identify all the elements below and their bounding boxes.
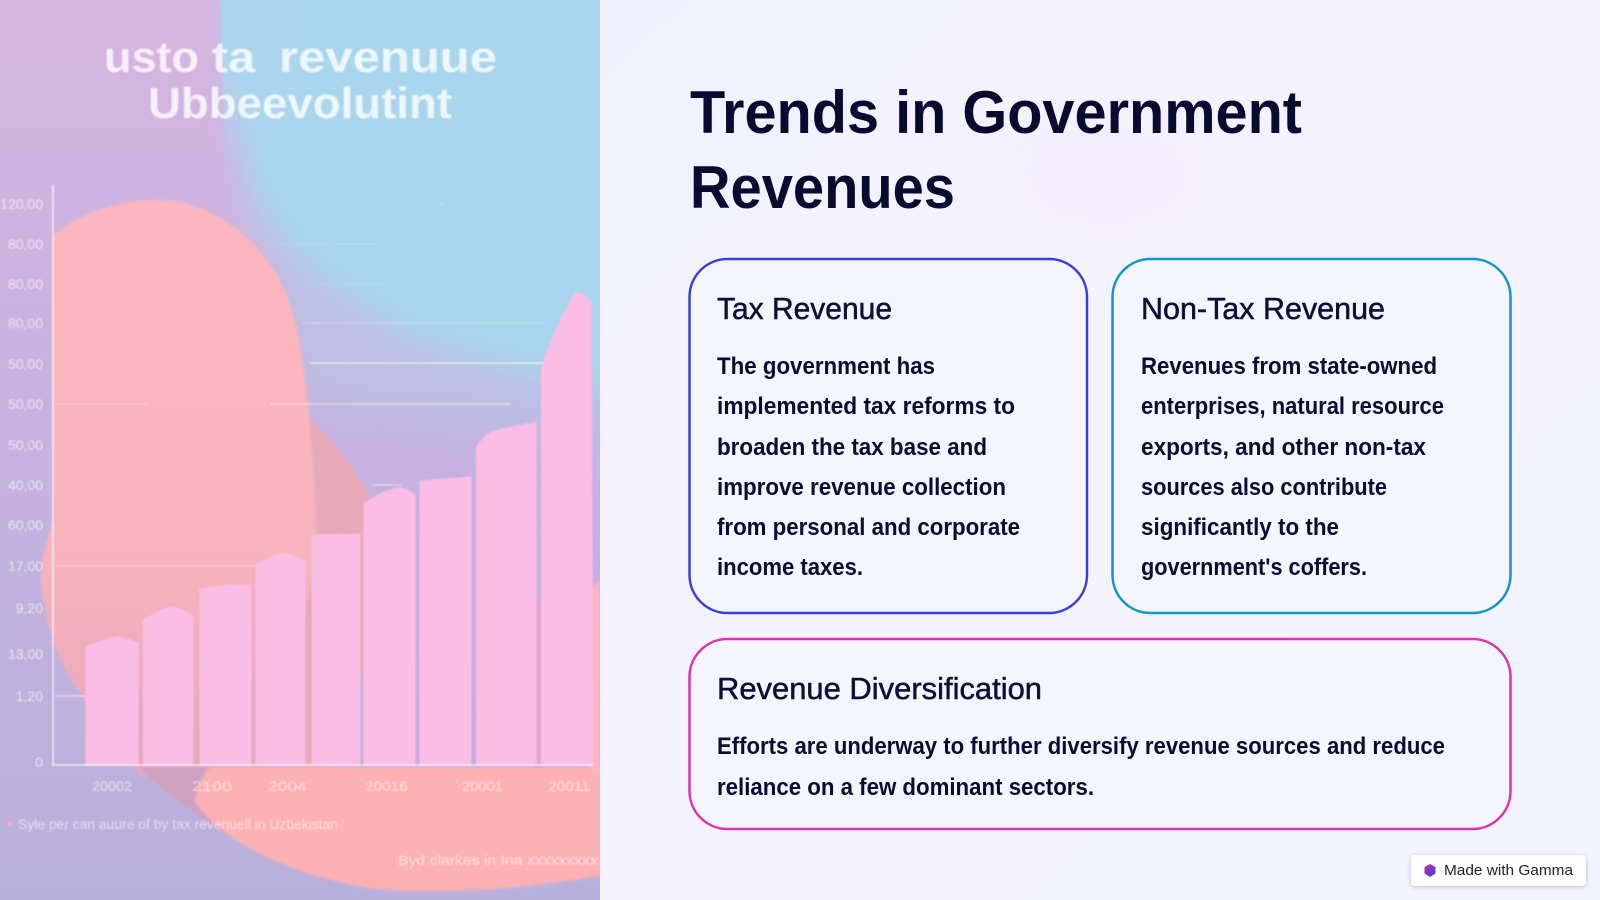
text: tax revenue body: implemented tax reforms to bbox=[717, 393, 1015, 420]
right edge salmon bbox=[590, 580, 600, 775]
x axis labels: 2100 bbox=[192, 778, 232, 794]
badge label: Made with Gamma bbox=[1444, 862, 1574, 879]
chart legend: Syle per can auure of by tax revenuell in Uzbekistan bbox=[18, 816, 338, 832]
image title bbox=[106, 43, 496, 120]
text: tax revenue body bbox=[717, 353, 1020, 581]
blue shape upper edge bbox=[220, 0, 242, 138]
panel: chart image bbox=[0, 0, 600, 900]
x axis labels: 20011 bbox=[548, 778, 590, 794]
text: tax revenue body: improve revenue collection bbox=[717, 474, 1006, 501]
image background bbox=[0, 0, 600, 900]
pink background glow bbox=[1020, 140, 1200, 210]
text: non-tax revenue body bbox=[1141, 353, 1444, 581]
grid lines bbox=[55, 322, 545, 698]
lower dark blob bbox=[141, 766, 222, 831]
x axis labels: 20001 bbox=[462, 778, 503, 794]
y axis labels: 80,00 bbox=[8, 276, 43, 292]
text: revenue diversification body: Efforts are underway to further diversify revenue sources and reduce bbox=[717, 733, 1445, 760]
axes bbox=[53, 185, 593, 765]
text: non-tax revenue body: government's coffers. bbox=[1141, 554, 1367, 581]
panel: non-tax revenue bbox=[1112, 259, 1510, 613]
text: non-tax revenue body: exports, and other non-tax bbox=[1141, 434, 1427, 461]
text: revenue diversification body bbox=[717, 733, 1445, 801]
y axis labels: 9,20 bbox=[16, 600, 43, 616]
text: non-tax revenue body: enterprises, natural resource bbox=[1141, 393, 1444, 420]
y axis labels: 0 bbox=[35, 754, 43, 770]
y axis labels: 120,00 bbox=[0, 196, 43, 212]
text: non-tax revenue body: significantly to the bbox=[1141, 514, 1339, 541]
image title: usto bbox=[104, 33, 199, 82]
text: revenue diversification body: reliance on a few dominant sectors. bbox=[717, 774, 1094, 801]
dark pink blob bbox=[133, 418, 372, 776]
x axis labels bbox=[92, 781, 590, 792]
y axis labels: 1,20 bbox=[16, 688, 43, 704]
y axis labels: 13,00 bbox=[8, 646, 43, 662]
image title: Ubbeevolutint bbox=[148, 79, 452, 128]
y axis labels: 80,00 bbox=[8, 236, 43, 252]
y axis labels: 50,00 bbox=[8, 356, 43, 372]
image title: revenuue bbox=[279, 33, 497, 82]
text: tax revenue body: income taxes. bbox=[717, 554, 863, 581]
y axis labels: 40,00 bbox=[8, 477, 43, 493]
heading: tax revenue: Tax Revenue bbox=[717, 291, 892, 326]
text: tax revenue body: The government has bbox=[717, 353, 935, 380]
x axis labels: 2004 bbox=[268, 778, 307, 794]
salmon blob bbox=[41, 200, 317, 775]
y axis labels: 17,00 bbox=[8, 558, 43, 574]
image title: ta bbox=[212, 33, 256, 82]
icon: gamma logo bbox=[1424, 864, 1436, 877]
x axis labels: 20016 bbox=[365, 778, 408, 794]
lower salmon blob bbox=[195, 767, 640, 891]
gap between last bars bbox=[534, 600, 544, 768]
panel: revenue diversification bbox=[690, 639, 1510, 829]
heading: revenue diversification: Revenue Diversification bbox=[717, 671, 1042, 706]
title bbox=[690, 79, 1302, 221]
x axis labels: 20002 bbox=[92, 778, 132, 794]
panel: tax revenue bbox=[690, 259, 1087, 613]
text: non-tax revenue body: Revenues from state-owned bbox=[1141, 353, 1437, 380]
title: Revenues bbox=[690, 154, 955, 221]
bar chart bbox=[86, 293, 593, 765]
title: Trends in Government bbox=[690, 79, 1302, 146]
y axis labels: 50,00 bbox=[8, 437, 43, 453]
y axis labels: 60,00 bbox=[8, 517, 43, 533]
text: tax revenue body: broaden the tax base and bbox=[717, 434, 987, 461]
blue haze bbox=[264, 244, 600, 442]
chart caption: Byd clarkes in Ina xxxxxxxxx bbox=[398, 852, 598, 868]
y axis labels: 80,00 bbox=[8, 315, 43, 331]
heading: non-tax revenue: Non-Tax Revenue bbox=[1141, 291, 1385, 326]
text: tax revenue body: from personal and corporate bbox=[717, 514, 1020, 541]
blue shape bbox=[217, 0, 600, 394]
y axis labels bbox=[0, 196, 43, 770]
text: non-tax revenue body: sources also contribute bbox=[1141, 474, 1387, 501]
right background bbox=[600, 0, 1600, 900]
badge: made with gamma bbox=[1411, 855, 1586, 886]
y axis labels: 50,00 bbox=[8, 396, 43, 412]
